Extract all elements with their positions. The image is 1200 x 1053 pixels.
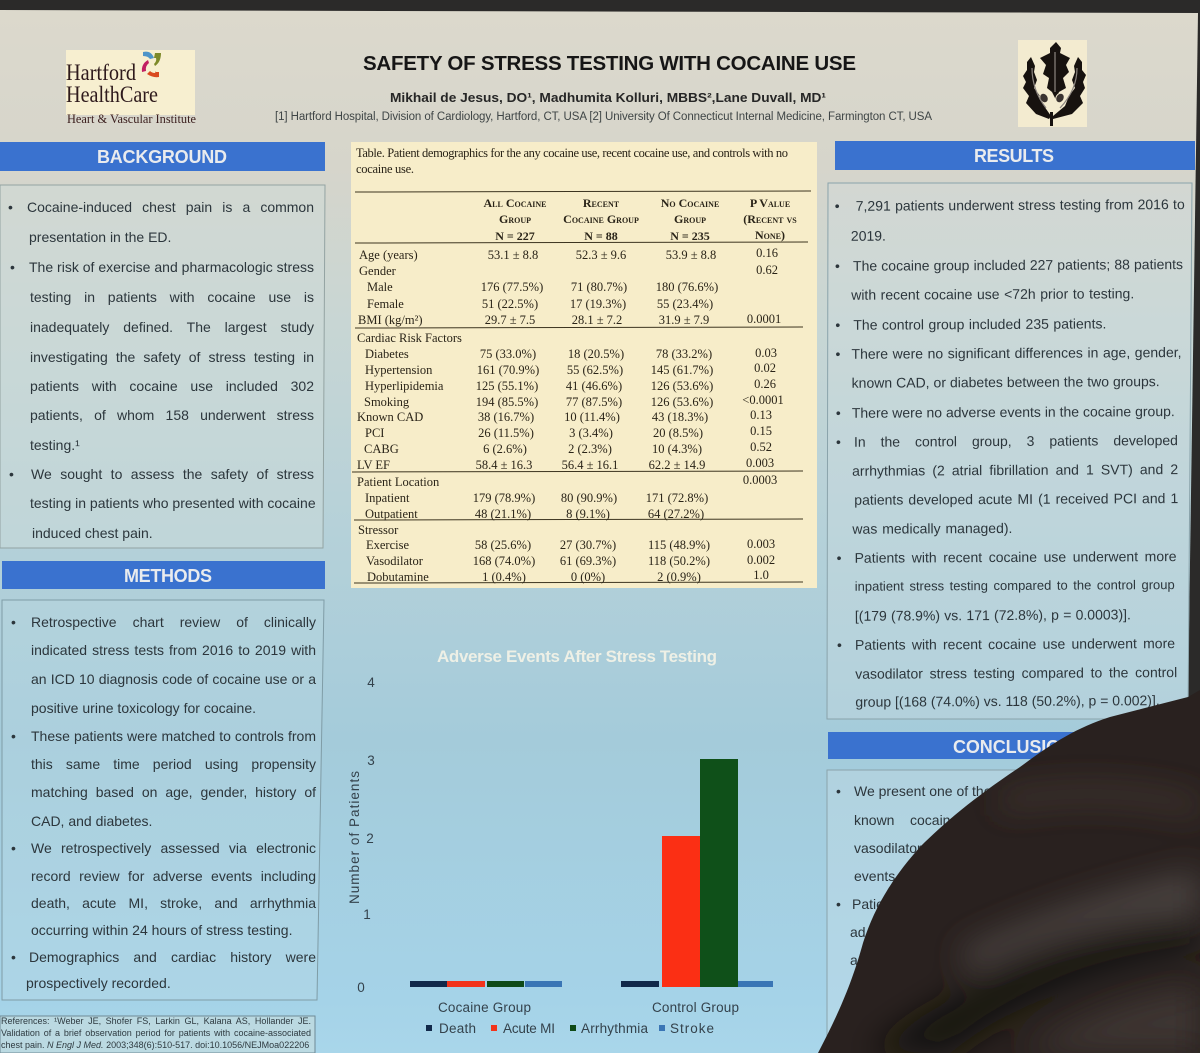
table column: all cocaine group: 161 (70.9%) — [477, 363, 539, 377]
text: results bullets: patients developed acute MI (1 received PCI and 1 — [854, 490, 1178, 508]
table row labels: Patient Location — [357, 475, 440, 489]
heading: results — [835, 141, 1195, 170]
table row labels: Vasodilator — [366, 554, 424, 568]
table column: all cocaine group: 51 (22.5%) — [482, 297, 538, 311]
y axis ticks: 2 — [366, 831, 374, 846]
table row labels: Outpatient — [365, 507, 418, 521]
text: conclusions bullets: We present one of the — [854, 783, 992, 799]
table column: no cocaine group: 53.9 ± 8.8 — [666, 248, 716, 262]
text: methods bullets: occurring within 24 hours of stress testing. — [31, 922, 292, 938]
text: background bullets: We sought to assess the safety of stress — [31, 466, 314, 482]
x axis labels — [438, 1000, 739, 1015]
table column: p values: 0.15 — [750, 424, 772, 438]
y axis ticks: 1 — [363, 907, 371, 922]
table column: no cocaine group: 55 (23.4%) — [657, 297, 713, 311]
chart legend: Stroke — [670, 1021, 714, 1036]
table column: all cocaine group: 1 (0.4%) — [482, 570, 526, 584]
text: results bullets: inpatient stress testing compared to the control group — [855, 577, 1175, 594]
table column: recent cocaine group: 41 (46.6%) — [566, 379, 622, 393]
table column: recent cocaine group: 55 (62.5%) — [567, 363, 623, 377]
table column: all cocaine group: 176 (77.5%) — [481, 280, 543, 294]
text: methods bullets: We retrospectively assessed via electronic — [31, 840, 316, 856]
text: conclusions bullets: • — [836, 783, 841, 799]
text: conclusions bullets: cocaine — [910, 812, 958, 828]
panel: background — [0, 185, 325, 548]
references — [0, 1014, 316, 1053]
table column: p values: 0.16 — [756, 246, 778, 260]
table row labels: Exercise — [366, 538, 409, 552]
text: conclusions bullets: Patients — [852, 896, 903, 912]
table column: no cocaine group: 115 (48.9%) — [648, 538, 710, 552]
table row labels: Hyperlipidemia — [365, 379, 444, 393]
header: Hartford HealthCare logo — [66, 50, 196, 126]
text: results bullets: 2019. — [851, 228, 886, 244]
table column: no cocaine group: 64 (27.2%) — [648, 507, 704, 521]
text: results bullets — [829, 189, 1191, 716]
heading: conclusions — [828, 732, 1168, 759]
text: methods bullets: indicated stress tests from 2016 to 2019 with — [31, 642, 316, 658]
header: Hartford HealthCare logo: Hartford — [66, 60, 136, 85]
text: results bullets: with recent cocaine use <72h prior to testing. — [851, 285, 1134, 303]
text: conclusions bullets: events — [854, 868, 895, 884]
text: results bullets: • — [837, 637, 842, 653]
table column headers: None) — [755, 228, 785, 242]
table column: all cocaine group: 75 (33.0%) — [480, 347, 536, 361]
bars: cocaine group — [410, 981, 562, 987]
table column: recent cocaine group: 0 (0%) — [571, 570, 605, 584]
table column: no cocaine group: 126 (53.6%) — [651, 395, 713, 409]
table row labels: Cardiac Risk Factors — [357, 331, 462, 345]
table row labels: Smoking — [364, 395, 410, 409]
text: results bullets: Patients with recent cocaine use underwent more — [855, 548, 1177, 566]
references: Validation of a brief observation period for patients with cocaine-associated — [1, 1028, 311, 1038]
table column headers: N = 88 — [584, 229, 618, 243]
text: results bullets: was medically managed). — [852, 520, 1012, 537]
text: results bullets: [(179 (78.9%) vs. 171 (72.8%), p = 0.0003)]. — [855, 606, 1131, 624]
y axis ticks — [357, 675, 375, 995]
table column headers: Group — [499, 212, 531, 226]
icon: oak leaf logo — [1018, 40, 1087, 127]
table row labels — [357, 248, 462, 584]
chart legend: Death — [439, 1021, 476, 1036]
text: results bullets: There were no significant differences in age, gender, — [851, 344, 1182, 362]
table column: p values: 0.02 — [754, 361, 776, 375]
text: results bullets: • — [835, 258, 840, 274]
table column: all cocaine group: 168 (74.0%) — [473, 554, 535, 568]
table column headers: No Cocaine — [661, 196, 719, 210]
table column: recent cocaine group: 56.4 ± 16.1 — [562, 458, 618, 472]
table row labels: Female — [367, 297, 404, 311]
bars: control group — [621, 759, 773, 987]
text: methods bullets: • — [11, 840, 16, 856]
table column: no cocaine group: 10 (4.3%) — [652, 442, 702, 456]
table column headers: (Recent vs — [743, 212, 797, 226]
table column: p values: <0.0001 — [742, 393, 784, 407]
table column: no cocaine group: 171 (72.8%) — [646, 491, 708, 505]
text: methods bullets: Retrospective chart review of clinically — [31, 614, 316, 630]
text: results bullets: • — [836, 405, 841, 421]
table column: no cocaine group: 118 (50.2%) — [648, 554, 710, 568]
table row labels: Known CAD — [357, 410, 423, 424]
table column: all cocaine group: 48 (21.1%) — [475, 507, 531, 521]
table column headers: P Value — [750, 196, 790, 210]
table column headers: Recent — [583, 196, 620, 210]
table row labels: Dobutamine — [367, 570, 429, 584]
table column: no cocaine group: 78 (33.2%) — [656, 347, 712, 361]
text: background bullets: testing in patients with cocaine use is — [30, 289, 314, 305]
text: background bullets: testing.¹ — [30, 437, 80, 453]
text: methods bullets: positive urine toxicology for cocaine. — [31, 700, 256, 716]
heading: methods: METHODS — [124, 566, 212, 586]
y axis ticks: 0 — [357, 980, 365, 995]
chart legend: Arrhythmia — [581, 1021, 648, 1036]
table column: all cocaine group: 58.4 ± 16.3 — [476, 458, 532, 472]
text: results bullets: known CAD, or diabetes between the two groups. — [852, 373, 1160, 391]
text: background bullets — [0, 190, 325, 545]
table column: no cocaine group: 145 (61.7%) — [651, 363, 713, 377]
text: results bullets: There were no adverse events in the cocaine group. — [852, 403, 1175, 421]
table column: p values: 0.0001 — [747, 312, 781, 326]
table column: recent cocaine group: 61 (69.3%) — [560, 554, 616, 568]
table column: no cocaine group: 2 (0.9%) — [657, 570, 701, 584]
text: background bullets: Cocaine-induced chest pain is a common — [27, 199, 314, 215]
text: methods bullets: These patients were matched to controls from — [31, 728, 316, 744]
table column: p values: 0.002 — [747, 553, 775, 567]
references: chest pain. N Engl J Med. 2003;348(6):510-517. doi:10.1056/NEJMoa022206 — [1, 1040, 309, 1050]
table column: p values — [742, 246, 784, 582]
table row labels: Hypertension — [365, 363, 433, 377]
text: results bullets: • — [837, 550, 842, 566]
table column: all cocaine group: 26 (11.5%) — [478, 426, 534, 440]
table column headers — [483, 196, 797, 243]
table column: recent cocaine group: 27 (30.7%) — [560, 538, 616, 552]
chart title: Adverse Events After Stress Testing — [437, 647, 717, 666]
y axis ticks: 3 — [367, 753, 375, 768]
panel: results — [827, 183, 1192, 719]
text: results bullets: vasodilator stress testing compared to the control — [855, 664, 1177, 682]
text: methods bullets: CAD, and diabetes. — [31, 813, 152, 829]
table column: p values: 0.13 — [750, 408, 772, 422]
table row labels: BMI (kg/m²) — [358, 313, 423, 327]
text: background bullets: The risk of exercise and pharmacologic stress — [29, 259, 314, 275]
y axis ticks: 4 — [367, 675, 375, 690]
table row labels: CABG — [364, 442, 399, 456]
table column: no cocaine group: 126 (53.6%) — [651, 379, 713, 393]
x axis labels: Cocaine Group — [438, 1000, 531, 1015]
table column headers: N = 235 — [670, 229, 710, 243]
panel: conclusions — [827, 770, 1177, 1053]
table column: recent cocaine group: 10 (11.4%) — [564, 410, 620, 424]
table row labels: Stressor — [358, 523, 399, 537]
text: methods bullets: record review for adverse events including — [31, 868, 316, 884]
heading: results: RESULTS — [974, 146, 1054, 166]
table column: no cocaine group: 180 (76.6%) — [656, 280, 718, 294]
table column: no cocaine group — [646, 248, 718, 584]
table column: recent cocaine group: 2 (2.3%) — [568, 442, 612, 456]
text: background bullets: • — [10, 259, 15, 275]
table row labels: Inpatient — [365, 491, 410, 505]
table caption — [356, 146, 788, 176]
text: background bullets: induced chest pain. — [32, 525, 153, 541]
table caption: cocaine use. — [356, 162, 414, 176]
text: conclusions bullets — [836, 783, 992, 968]
table column: all cocaine group: 38 (16.7%) — [478, 410, 534, 424]
table column: recent cocaine group: 18 (20.5%) — [568, 347, 624, 361]
table column: no cocaine group: 62.2 ± 14.9 — [649, 458, 705, 472]
text: results bullets: Patients with recent cocaine use underwent more — [855, 635, 1175, 653]
text: methods bullets: this same time period using propensity — [31, 756, 316, 772]
table column: all cocaine group: 125 (55.1%) — [476, 379, 538, 393]
table column: no cocaine group: 20 (8.5%) — [653, 426, 703, 440]
table column: recent cocaine group: 77 (87.5%) — [566, 395, 622, 409]
text: background bullets: patients, of whom 158 underwent stress — [30, 407, 314, 423]
text: background bullets: • — [9, 466, 14, 482]
header: Hartford HealthCare logo: Heart & Vascular Institute — [67, 111, 196, 126]
table column: recent cocaine group: 80 (90.9%) — [561, 491, 617, 505]
table row labels: PCI — [365, 426, 384, 440]
heading: conclusions: CONCLUSIONS — [953, 737, 1085, 757]
heading: background — [0, 142, 325, 171]
table column: recent cocaine group: 71 (80.7%) — [571, 280, 627, 294]
header: affiliations: [1] Hartford Hospital, Division of Cardiology, Hartford, CT, USA [2] University Of Connecticut Internal Medicine, Farmington CT, USA — [275, 111, 932, 123]
header: title: SAFETY OF STRESS TESTING WITH COCAINE USE — [363, 52, 856, 75]
text: results bullets: • — [835, 198, 840, 214]
text: methods bullets: death, acute MI, stroke, and arrhythmia — [31, 895, 316, 911]
y axis title: Number of Patients — [347, 771, 362, 904]
table column: p values: 0.03 — [755, 346, 777, 360]
heading: methods — [2, 561, 325, 589]
table column: all cocaine group — [473, 248, 543, 584]
table column: recent cocaine group: 17 (19.3%) — [570, 297, 626, 311]
photo foreground: person's shoulder — [818, 690, 1200, 1053]
text: results bullets: • — [836, 434, 841, 450]
text: background bullets: presentation in the ED. — [29, 229, 171, 245]
text: methods bullets: prospectively recorded. — [26, 975, 171, 991]
text: conclusions bullets: known — [854, 812, 894, 828]
text: results bullets: • — [835, 317, 840, 333]
panel: methods — [0, 600, 325, 1000]
table row labels: Gender — [359, 264, 397, 278]
text: background bullets: patients with cocaine use included 302 — [30, 378, 314, 394]
chart legend — [426, 1021, 714, 1036]
x axis labels: Control Group — [652, 1000, 739, 1015]
references: References: ¹Weber JE, Shofer FS, Larkin GL, Kalana AS, Hollander JE. — [1, 1016, 311, 1026]
text: results bullets: 7,291 patients underwent stress testing from 2016 to — [856, 196, 1185, 214]
table column: all cocaine group: 58 (25.6%) — [475, 538, 531, 552]
text: methods bullets: • — [11, 728, 16, 744]
text: results bullets: group [(168 (74.0%) vs. 118 (50.2%), p = 0.002)]. — [855, 692, 1160, 710]
text: results bullets: • — [835, 346, 840, 362]
text: background bullets: • — [8, 199, 13, 215]
table row labels: Diabetes — [365, 347, 409, 361]
table column: p values: 0.0003 — [743, 473, 777, 487]
table row labels: Age (years) — [359, 248, 418, 262]
table column: all cocaine group: 29.7 ± 7.5 — [485, 313, 535, 327]
table caption: Table. Patient demographics for the any cocaine use, recent cocaine use, and controls with no — [356, 146, 788, 160]
text: background bullets: testing in patients who presented with cocaine — [30, 495, 316, 511]
text: methods bullets: an ICD 10 diagnosis code of cocaine use or a — [31, 671, 316, 687]
text: conclusions bullets: ad — [850, 924, 866, 940]
table column: p values: 0.52 — [750, 440, 772, 454]
text: methods bullets: Demographics and cardiac history were — [29, 949, 316, 965]
text: methods bullets — [0, 610, 325, 995]
text: conclusions bullets: vasodilator — [854, 840, 922, 856]
table column: recent cocaine group: 8 (9.1%) — [566, 507, 610, 521]
text: conclusions bullets: • — [836, 896, 841, 912]
table column: recent cocaine group: 3 (3.4%) — [569, 426, 613, 440]
bar chart: adverse events after stress testing — [347, 647, 773, 1036]
text: methods bullets: • — [11, 614, 16, 630]
table column: all cocaine group: 53.1 ± 8.8 — [488, 248, 538, 262]
table column: all cocaine group: 6 (2.6%) — [483, 442, 527, 456]
table column: p values: 1.0 — [753, 568, 769, 582]
table column: recent cocaine group: 28.1 ± 7.2 — [572, 313, 622, 327]
table column: p values: 0.003 — [747, 537, 775, 551]
table column: all cocaine group: 179 (78.9%) — [473, 491, 535, 505]
table column: no cocaine group: 31.9 ± 7.9 — [659, 313, 709, 327]
table column: p values: 0.003 — [746, 456, 774, 470]
text: background bullets: inadequately defined. The largest study — [30, 319, 314, 335]
text: methods bullets: matching based on age, gender, history of — [31, 784, 316, 800]
table column: p values: 0.62 — [756, 263, 778, 277]
panel: patient demographics table — [351, 142, 817, 588]
table column: all cocaine group: 194 (85.5%) — [476, 395, 538, 409]
text: results bullets: The cocaine group included 227 patients; 88 patients — [853, 256, 1183, 274]
table column: recent cocaine group: 52.3 ± 9.6 — [576, 248, 626, 262]
table column: p values: 0.26 — [754, 377, 776, 391]
text: conclusions bullets: a — [850, 952, 858, 968]
text: results bullets: In the control group, 3 patients developed — [854, 432, 1178, 450]
header: Hartford HealthCare logo: HealthCare — [66, 82, 158, 107]
table column headers: Group — [674, 212, 706, 226]
header: authors: Mikhail de Jesus, DO¹, Madhumita Kolluri, MBBS²,Lane Duvall, MD¹ — [390, 90, 826, 105]
table column: no cocaine group: 43 (18.3%) — [652, 410, 708, 424]
chart legend: Acute MI — [503, 1021, 555, 1036]
table row labels: Male — [367, 280, 393, 294]
table rules — [352, 191, 811, 583]
text: methods bullets: • — [11, 949, 16, 965]
table column headers: Cocaine Group — [563, 212, 639, 226]
heading: background: BACKGROUND — [97, 147, 227, 167]
table column: recent cocaine group — [560, 248, 627, 584]
text: results bullets: arrhythmias (2 atrial fibrillation and 1 SVT) and 2 — [852, 461, 1178, 479]
table row labels: LV EF — [357, 458, 390, 472]
text: background bullets: investigating the safety of stress testing in — [30, 349, 314, 365]
text: results bullets: The control group included 235 patients. — [853, 315, 1106, 333]
table column headers: All Cocaine — [483, 196, 547, 210]
table column headers: N = 227 — [495, 229, 535, 243]
